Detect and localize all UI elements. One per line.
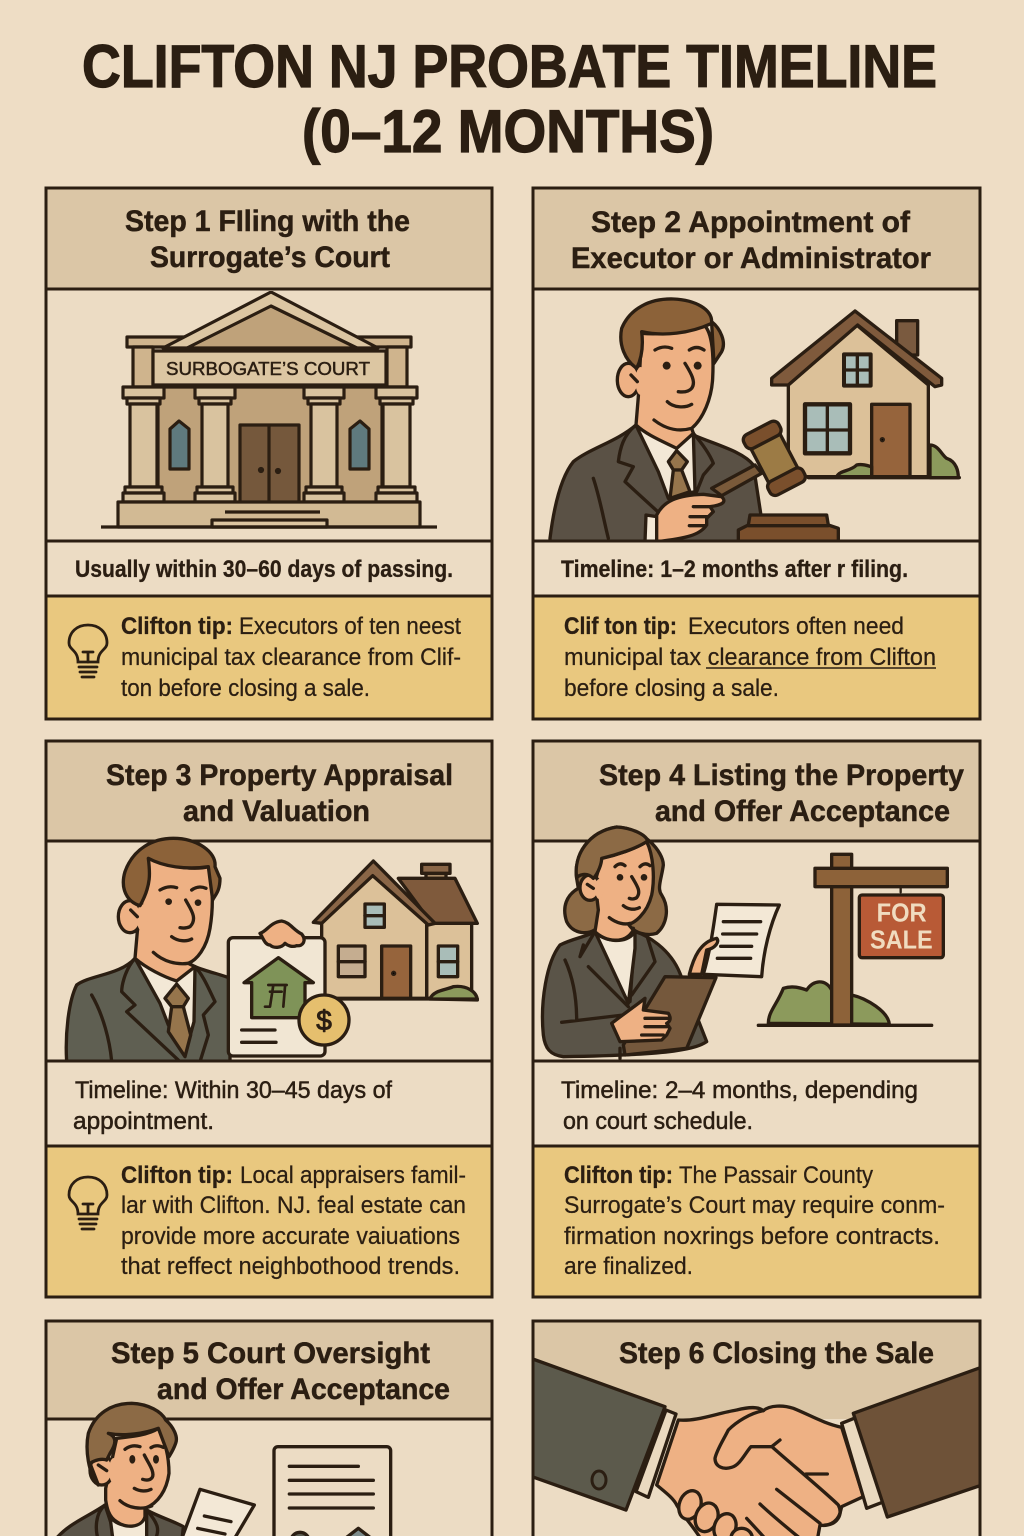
illustration: handshake (530, 1358, 985, 1536)
callout: Clifton tip (533, 1147, 980, 1297)
step 2 heading (533, 188, 980, 289)
timeline text: Timeline: 2–4 months, depending (561, 1077, 918, 1104)
panel: step 2 (533, 188, 980, 719)
step 3 heading (46, 741, 492, 841)
callout: Clifton tip: Executors of ten neest (239, 613, 461, 640)
callout: Clifton tip (46, 597, 492, 719)
timeline text (533, 541, 980, 596)
step 5 heading: Step 5 Court Oversight (111, 1337, 430, 1370)
timeline text (46, 541, 492, 596)
step 1 heading (46, 188, 492, 289)
illustration: agent with clipboard and for sale sign: SALE (870, 926, 933, 954)
step 5 heading (46, 1321, 492, 1419)
step 6 heading: Step 6 Closing the Sale (619, 1337, 934, 1370)
panel: step 6 (530, 1321, 985, 1536)
callout: Clifton tip: municipal tax clearance from Clif- (121, 644, 461, 671)
timeline text (46, 1062, 492, 1146)
step 2 heading: Step 2 Appointment of (591, 206, 911, 239)
illustration: surrogate's court building (101, 292, 437, 527)
step 3 heading: and Valuation (183, 795, 370, 828)
title (82, 33, 937, 165)
illustration: agent with clipboard and for sale sign (542, 827, 947, 1058)
panel: step 5 (46, 1321, 492, 1536)
timeline text (533, 1062, 980, 1146)
callout: Clifton tip: municipal tax clearance from Clifton (564, 644, 936, 671)
callout: Clifton tip: that reffect neighbothood trends. (121, 1253, 460, 1280)
illustration: official reviewing documents (55, 1403, 391, 1536)
callout: Clifton tip: are finalized. (564, 1253, 693, 1280)
panel: step 3 (46, 741, 492, 1297)
illustration: appraiser with valuation document and house (66, 838, 477, 1062)
callout: Clifton tip: Clifton tip: (564, 1162, 673, 1189)
step 5 heading: and Offer Acceptance (157, 1373, 450, 1406)
step 3 heading: Step 3 Property Appraisal (106, 759, 453, 792)
step 4 heading (533, 741, 980, 841)
callout: Clifton tip: before closing a sale. (564, 675, 779, 702)
timeline text: Timeline: Within 30–45 days of (75, 1077, 392, 1104)
callout: Clifton tip: Clif ton tip: (564, 613, 677, 640)
illustration: surrogate's court building: SURBOGATE’S COURT (166, 358, 370, 379)
timeline text: Timeline: 1–2 months after r filing. (561, 556, 908, 583)
panel: step 1 (46, 188, 492, 719)
illustration: executor with gavel and house (550, 299, 959, 542)
callout: Clifton tip: Surrogate’s Court may require conm- (564, 1192, 945, 1219)
illustration: appraiser with valuation document and house: $ (316, 1005, 332, 1036)
title: CLIFTON NJ PROBATE TIMELINE (82, 33, 937, 100)
callout: Clifton tip (533, 597, 980, 719)
callout: Clifton tip: Clifton tip: (121, 613, 233, 640)
step 2 heading: Executor or Administrator (571, 242, 931, 275)
callout: Clifton tip: Clifton tip: (121, 1162, 233, 1189)
callout: Clifton tip: lar with Clifton. NJ. feal estate can (121, 1192, 466, 1219)
icon: light bulb (69, 625, 107, 677)
callout: Clifton tip: provide more accurate vaiuations (121, 1223, 460, 1250)
illustration: agent with clipboard and for sale sign: FOR (877, 900, 927, 928)
callout: Clifton tip: firmation noxrings before contracts. (564, 1223, 940, 1250)
step 6 heading (533, 1321, 980, 1419)
callout: Clifton tip: Executors often need (688, 613, 904, 640)
callout: Clifton tip (46, 1147, 492, 1297)
cufflink (592, 1471, 606, 1489)
timeline text: Usually within 30–60 days of passing. (75, 556, 453, 583)
step 1 heading: Surrogate’s Court (150, 241, 390, 274)
callout: Clifton tip: The Passair County (679, 1162, 873, 1189)
step 4 heading: Step 4 Listing the Property (599, 759, 964, 792)
panel: step 4 (533, 741, 980, 1297)
callout: Clifton tip: Local appraisers famil- (240, 1162, 466, 1189)
timeline text: on court schedule. (563, 1108, 753, 1135)
icon: light bulb (69, 1177, 107, 1229)
title: (0–12 MONTHS) (302, 98, 714, 165)
step 1 heading: Step 1 FIling with the (125, 205, 410, 238)
callout: Clifton tip: ton before closing a sale. (121, 675, 370, 702)
timeline text: appointment. (73, 1108, 214, 1135)
step 4 heading: and Offer Acceptance (655, 795, 950, 828)
